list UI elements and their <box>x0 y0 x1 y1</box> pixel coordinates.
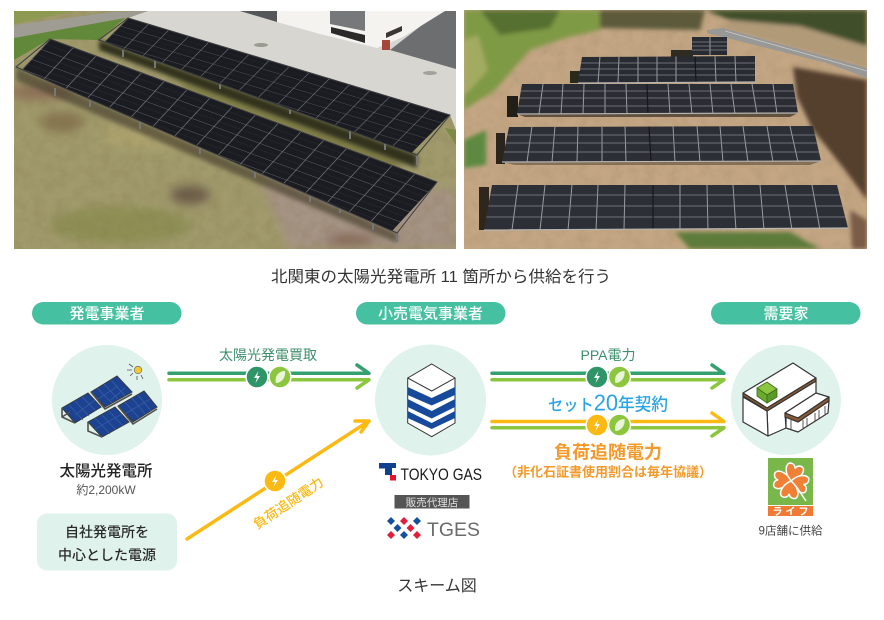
heading pill: electricity retailer <box>356 302 506 324</box>
icon: office building <box>375 344 486 456</box>
caption: scheme diagram: スキーム図 <box>397 578 477 595</box>
logo: TGES <box>387 517 480 541</box>
logo: Life clover: ライフ <box>772 506 808 518</box>
label: load-following power and non-fossil certificate note: 負荷追随電力 <box>554 442 662 462</box>
logo: Tokyo Gas <box>379 463 482 484</box>
box: own power plants: 中心とした電源 <box>58 547 156 563</box>
logo: TGES: TGES <box>427 520 480 541</box>
label: load-following power and non-fossil certificate note <box>504 442 712 480</box>
photo: solar arrays beside a building <box>0 11 456 249</box>
label: PPA power: PPA電力 <box>581 347 635 363</box>
arrow: solar power purchase <box>169 365 369 388</box>
heading pill: electricity retailer: 小売電気事業者 <box>378 306 483 322</box>
logo: Life clover <box>768 458 813 518</box>
arrow: load-following power <box>187 421 369 539</box>
logo: Tokyo Gas: TOKYO GAS <box>400 466 482 484</box>
text: solar power plant, about 2,200 kW <box>59 462 153 497</box>
caption: supply from 11 solar plants: 北関東の太陽光発電所 11 箇所から供給を行う <box>271 268 611 286</box>
heading pill: consumer <box>711 302 860 324</box>
heading pill: power generator: 発電事業者 <box>69 306 145 322</box>
heading pill: consumer: 需要家 <box>763 306 809 322</box>
tag: sales agent <box>394 495 470 509</box>
icon: solar panels with sun <box>52 345 162 455</box>
arrow: load-following power to consumer <box>492 413 724 436</box>
arrow: PPA power <box>492 365 724 388</box>
box: own power plants: 自社発電所を <box>65 524 149 540</box>
tag: sales agent: 販売代理店 <box>406 496 458 509</box>
text: supplied to 9 stores: 9店舗に供給 <box>759 524 823 538</box>
label: load-following power and non-fossil certificate note: （非化石証書使用割合は毎年協議） <box>504 464 712 480</box>
text: solar power plant, about 2,200 kW: 太陽光発電所 <box>59 462 153 480</box>
heading pill: power generator <box>32 302 182 324</box>
box: own power plants <box>37 514 177 570</box>
text: solar power plant, about 2,200 kW: 約2,200kW <box>76 482 136 497</box>
icon: supermarket building <box>731 345 841 455</box>
callout: 20-year set contract: セット20年契約 <box>548 390 668 416</box>
photo: tiered solar arrays on cleared land <box>464 10 867 249</box>
label: load-following power (diagonal): 負荷追随電力 <box>251 474 326 532</box>
label: solar power purchase: 太陽光発電買取 <box>219 347 317 363</box>
